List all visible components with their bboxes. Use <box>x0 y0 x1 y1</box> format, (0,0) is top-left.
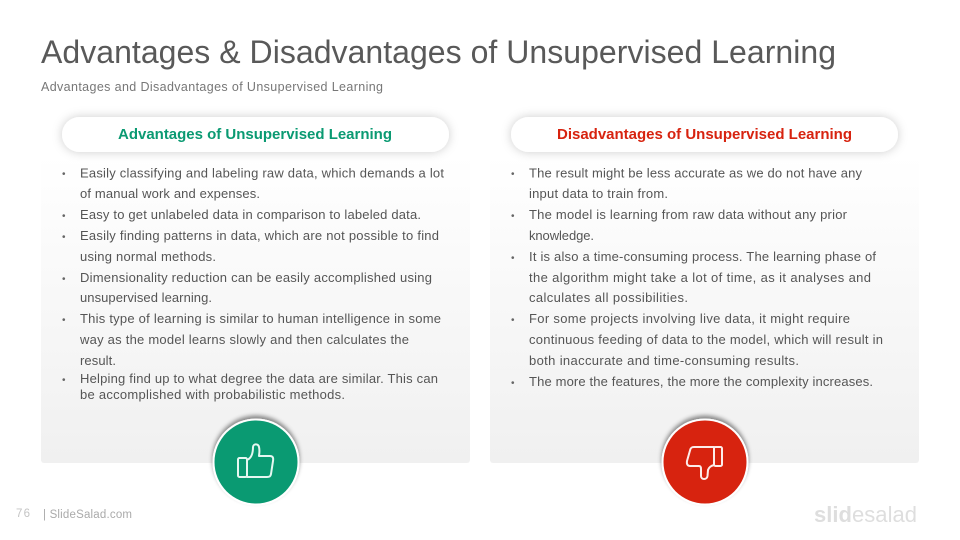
title: Advantages & Disadvantages of Unsupervised Learning <box>41 34 836 70</box>
bullet list: advantages: • <box>62 232 66 243</box>
heading pill: disadvantages <box>511 117 898 152</box>
heading pill: advantages <box>62 117 449 152</box>
bullet list: advantages: This type of learning is similar to human intelligence in some <box>80 311 441 326</box>
heading pill: advantages: Advantages of Unsupervised Learning <box>118 126 392 143</box>
bullet list: disadvantages <box>511 166 883 389</box>
bullet list: advantages: • <box>62 315 66 326</box>
bullet list: advantages: way as the model learns slowly and then calculates the <box>79 332 409 347</box>
bullet list: disadvantages: • <box>511 378 515 389</box>
bullet list: advantages: Helping find up to what degree the data are similar. This can <box>80 371 438 386</box>
bullet list: disadvantages: • <box>511 211 515 222</box>
heading pill: disadvantages: Disadvantages of Unsupervised Learning <box>557 126 852 143</box>
bullet list: disadvantages: The more the features, the more the complexity increases. <box>529 374 873 389</box>
bullet list: disadvantages: continuous feeding of data to the model, which will result in <box>529 332 883 347</box>
panel: disadvantages <box>490 113 919 506</box>
bullet list: advantages: using normal methods. <box>80 249 216 264</box>
bullet list: disadvantages: both inaccurate and time-consuming results. <box>529 353 799 368</box>
bullet list: advantages: Easy to get unlabeled data in comparison to labeled data. <box>80 207 421 222</box>
bullet list: advantages: • <box>62 211 66 222</box>
bullet list: disadvantages: the algorithm might take a lot of time, as it analyses and <box>529 270 871 285</box>
bullet list: advantages: • <box>62 274 66 285</box>
bullet list: disadvantages: It is also a time-consuming process. The learning phase of <box>529 249 876 264</box>
bullet list: advantages: Easily finding patterns in data, which are not possible to find <box>80 228 439 243</box>
bullet list: disadvantages: knowledge. <box>529 228 594 243</box>
bullet list: advantages: be accomplished with probabilistic methods. <box>80 387 345 402</box>
bullet list: disadvantages: • <box>511 169 515 180</box>
bullet list: advantages: • <box>62 375 66 386</box>
page number: 76 <box>16 508 30 520</box>
bullet list: advantages: • <box>62 169 66 180</box>
bullet list: disadvantages: • <box>511 253 515 264</box>
bullet list: disadvantages: • <box>511 315 515 326</box>
bullet list: advantages <box>62 166 444 402</box>
bullet list: advantages: of manual work and expenses. <box>80 186 260 201</box>
bullet list: advantages: unsupervised learning. <box>80 290 212 305</box>
logo: slidesalad: slidesalad <box>814 502 917 527</box>
bullet list: advantages: result. <box>80 353 116 368</box>
bullet list: advantages: Dimensionality reduction can be easily accomplished using <box>80 270 432 285</box>
bullet list: disadvantages: The model is learning from raw data without any prior <box>529 207 848 222</box>
subtitle: Advantages and Disadvantages of Unsupervised Learning <box>41 80 383 94</box>
footer source: | SlideSalad.com <box>43 509 132 521</box>
bullet list: advantages: Easily classifying and labeling raw data, which demands a lot <box>80 166 444 180</box>
panel background: disadvantages <box>490 113 919 463</box>
icon: thumbs down <box>662 418 748 506</box>
bullet list: disadvantages: input data to train from. <box>529 186 668 201</box>
bullet list: disadvantages: The result might be less accurate as we do not have any <box>529 166 862 180</box>
bullet list: disadvantages: calculates all possibilities. <box>529 290 688 305</box>
panel background: advantages <box>41 113 470 463</box>
icon: thumbs up <box>212 418 300 506</box>
panel: advantages <box>41 113 470 506</box>
bullet list: disadvantages: For some projects involving live data, it might require <box>529 311 850 326</box>
